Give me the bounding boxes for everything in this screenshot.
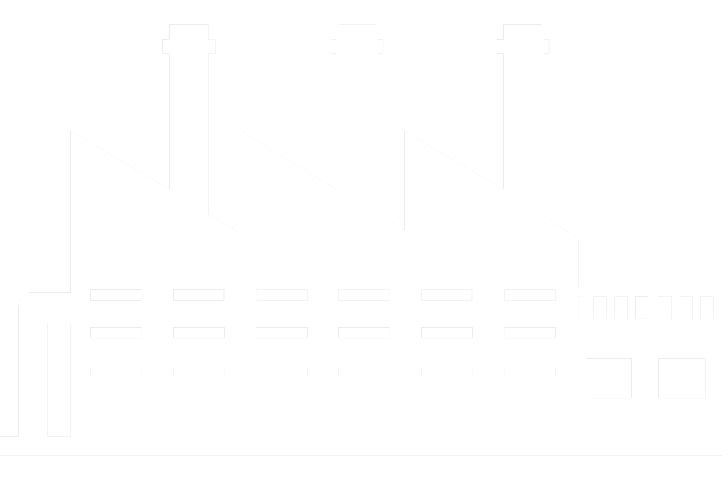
- right wing wall: [578, 240, 722, 288]
- small windows on right wing: [578, 296, 714, 319]
- saw-tooth roof: [30, 131, 578, 292]
- chimney: left: [162, 24, 216, 214]
- windows row 1: [90, 290, 556, 300]
- left annex and door: [0, 292, 70, 436]
- windows row 2: [90, 328, 556, 338]
- ground line: [0, 454, 722, 456]
- windows row 3: [90, 367, 556, 377]
- chimney: middle: [331, 24, 384, 54]
- large windows on right wing: [586, 358, 706, 398]
- chimney: right: [496, 24, 549, 189]
